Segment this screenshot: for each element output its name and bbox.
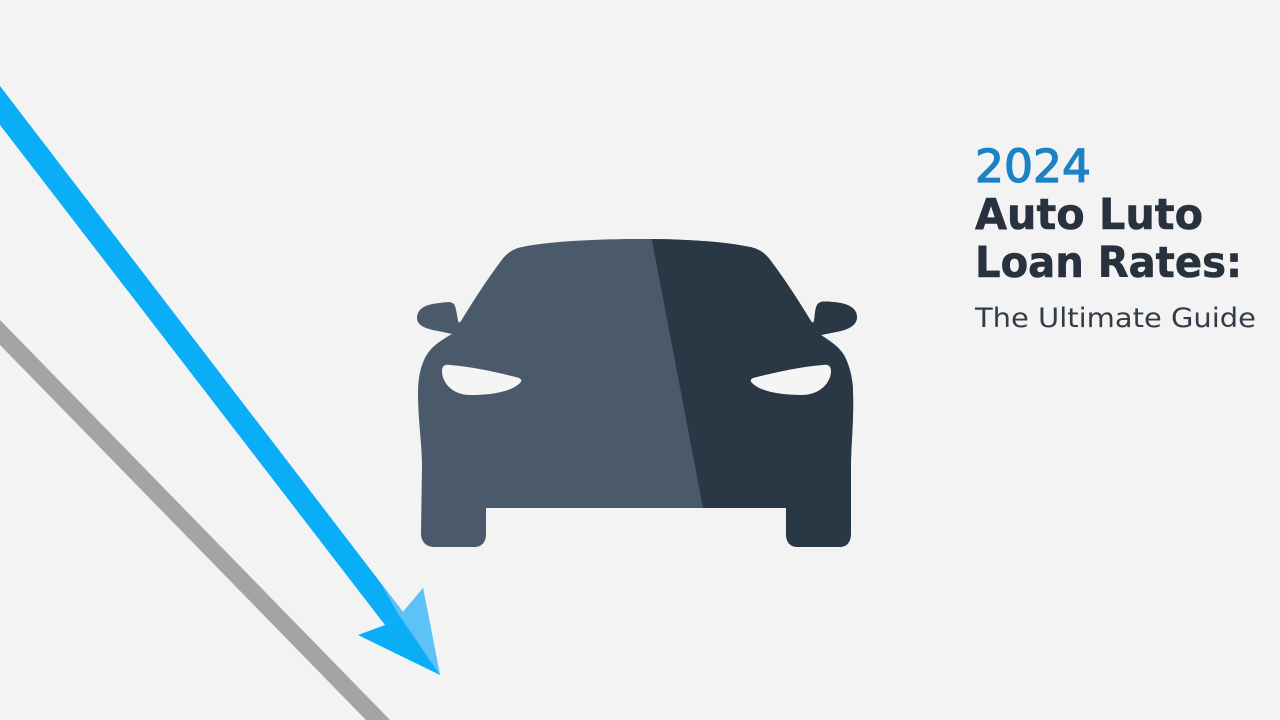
heading line 1: Auto Luto [975, 190, 1203, 240]
arrow head [358, 588, 440, 675]
car body right shaded side [652, 239, 857, 547]
left headlight [442, 365, 521, 395]
arrow head light facet [380, 582, 440, 675]
heading line 2: Loan Rates: [975, 238, 1242, 288]
subtitle: The Ultimate Guide [974, 303, 1256, 334]
car body left light side [417, 239, 857, 547]
title block [974, 140, 1256, 334]
year heading: 2024 [975, 140, 1091, 193]
grey diagonal line [0, 320, 390, 720]
icon: car front silhouette [417, 239, 857, 547]
blue down arrow [0, 86, 440, 675]
right headlight [751, 365, 831, 395]
arrow shaft [0, 86, 403, 625]
